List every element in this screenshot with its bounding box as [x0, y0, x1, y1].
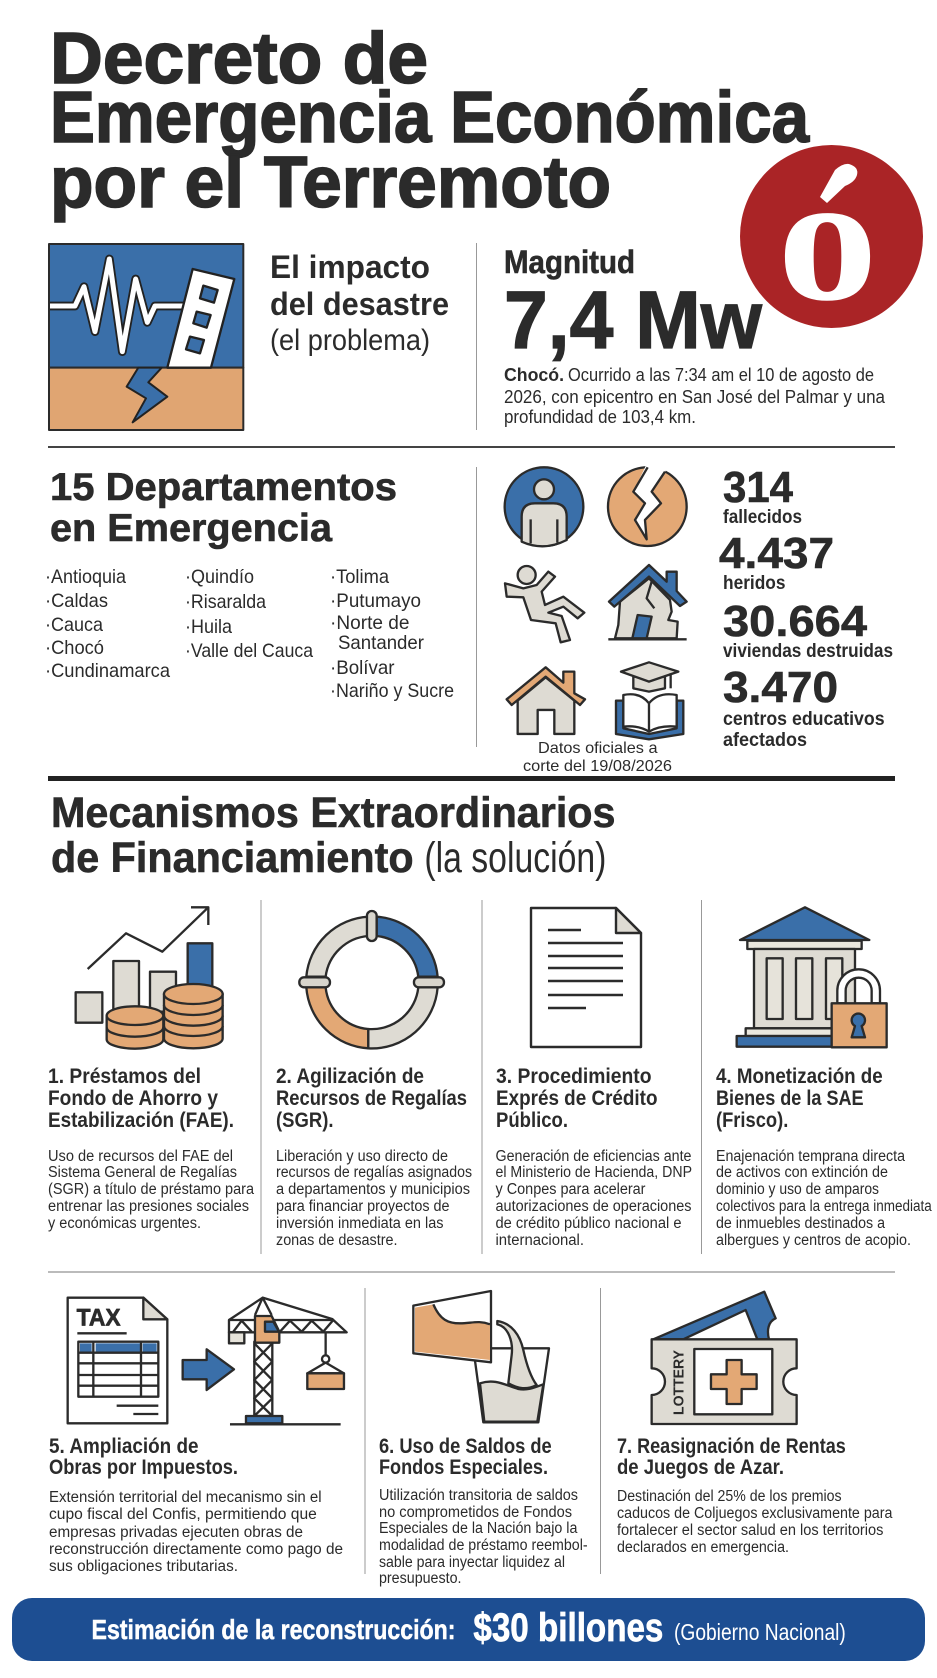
logo: red circle with ó: ó [777, 137, 878, 339]
mechanism 1: Estabilización (FAE). [48, 1109, 234, 1132]
mechanism 3: 3. Procedimiento [496, 1065, 652, 1088]
casualty statistics [719, 463, 893, 751]
earthquake description: 2026, con epicentro en San José del Palmar y una [504, 387, 886, 407]
heading: 15 departments [50, 466, 397, 550]
department list: ·Nariño y Sucre [330, 680, 454, 702]
mechanism 3: internacional. [496, 1232, 584, 1249]
mechanism 5: empresas privadas ejecuten obras de [49, 1524, 303, 1541]
mechanism 1 [48, 1065, 254, 1232]
mechanism 3: Público. [496, 1109, 568, 1132]
mechanism 1: Fondo de Ahorro y [48, 1087, 218, 1110]
mechanism 6: presupuesto. [379, 1570, 462, 1587]
mechanism 2: inversión inmediata en las [276, 1215, 444, 1232]
mechanism 7: Destinación del 25% de los premios [617, 1488, 842, 1505]
mechanism 6 [379, 1435, 588, 1587]
mechanism 2: Liberación y uso directo de [276, 1148, 448, 1165]
mechanism 6: 6. Uso de Saldos de [379, 1435, 552, 1458]
heading: impact of the disaster [270, 249, 449, 357]
title: Emergencia Económica [50, 78, 810, 158]
icon: graduation cap and book [616, 662, 683, 739]
heading: 15 departments: en Emergencia [50, 507, 332, 550]
title: Decreto de [50, 19, 428, 99]
heading: 15 departments: 15 Departamentos [50, 466, 397, 509]
icon: document [531, 908, 641, 1047]
heading: impact of the disaster: del desastre [270, 286, 449, 322]
mechanism 5: sus obligaciones tributarias. [49, 1558, 238, 1575]
mechanism 1: Uso de recursos del FAE del [48, 1148, 233, 1165]
mechanism 3 [496, 1065, 692, 1249]
earthquake description: profundidad de 103,4 km. [504, 407, 696, 427]
mechanism 7: caducos de Coljuegos exclusivamente para [617, 1505, 893, 1522]
heading: extraordinary financing mechanisms [51, 789, 616, 882]
mechanism 4: (Frisco). [716, 1109, 788, 1132]
department list: ·Putumayo [330, 590, 421, 612]
icon: cracked circle [608, 463, 687, 546]
banner: reconstruction estimate: (Gobierno Nacional) [674, 1619, 846, 1645]
casualty statistics: 314 [723, 463, 793, 512]
department list: ·Cauca [45, 614, 103, 636]
mechanism 7 [617, 1435, 893, 1556]
department list: ·Risaralda [185, 591, 266, 613]
logo: red circle with ó [740, 137, 923, 339]
mechanism 4: albergues y centros de acopio. [716, 1232, 911, 1249]
mechanism 4: de activos con extinción de [716, 1164, 888, 1181]
title [50, 19, 810, 223]
heading: impact of the disaster: (el problema) [270, 324, 430, 357]
department list: ·Caldas [45, 590, 108, 612]
department list: ·Bolívar [330, 657, 395, 679]
icon: pouring liquid [413, 1291, 549, 1422]
icon: house [507, 667, 585, 734]
mechanism 3: de crédito público nacional e [496, 1215, 682, 1232]
banner: reconstruction estimate: $30 billones [473, 1606, 663, 1650]
heading: extraordinary financing mechanisms: Mecanismos Extraordinarios [51, 789, 616, 837]
mechanism 1: 1. Préstamos del [48, 1065, 201, 1088]
mechanism 7: declarados en emergencia. [617, 1539, 789, 1556]
casualty statistics: 4.437 [719, 529, 834, 578]
department list: ·Cundinamarca [45, 660, 170, 682]
icon: bank and padlock [737, 907, 887, 1047]
mechanism 4: dominio y uso de amparos [716, 1181, 879, 1198]
mechanism 1: y económicas urgentes. [48, 1215, 201, 1232]
department list: ·Valle del Cauca [185, 640, 313, 662]
mechanism 2: para financiar proyectos de [276, 1198, 450, 1215]
heading: extraordinary financing mechanisms: de Financiamiento [51, 834, 414, 882]
mechanism 5: Extensión territorial del mecanismo sin el [49, 1489, 322, 1506]
heading: extraordinary financing mechanisms: (la solución) [424, 834, 606, 882]
earthquake description: Ocurrido a las 7:34 am el 10 de agosto de [568, 365, 874, 385]
mechanism 6: Especiales de la Nación bajo la [379, 1520, 578, 1537]
casualty statistics: heridos [723, 573, 786, 594]
mechanism 5: reconstrucción directamente como pago de [49, 1541, 343, 1558]
mechanism 3: Generación de eficiencias ante [496, 1148, 692, 1165]
banner: reconstruction estimate: Estimación de la reconstrucción: [92, 1614, 456, 1645]
department list: ·Norte de [330, 612, 410, 634]
mechanism 1: entrenar las presiones sociales [48, 1198, 249, 1215]
earthquake description [504, 365, 886, 427]
mechanism 7: 7. Reasignación de Rentas [617, 1435, 846, 1458]
icon: lottery ticket [652, 1292, 797, 1424]
mechanism 5: cupo fiscal del Confis, permitiendo que [49, 1506, 317, 1523]
department list [45, 566, 454, 702]
icon: falling person [505, 566, 584, 642]
icon: lottery ticket: LOTTERY [671, 1350, 687, 1415]
mechanism 6: sable para inyectar liquidez al [379, 1554, 565, 1571]
mechanism 2: a departamentos y municipios [276, 1181, 470, 1198]
mechanism 4: 4. Monetización de [716, 1065, 883, 1088]
magnitude stat: Magnitud [504, 244, 635, 280]
mechanism 6: modalidad de préstamo reembol- [379, 1537, 588, 1554]
icon: tax document [68, 1298, 167, 1423]
mechanism 3: el Ministerio de Hacienda, DNP [496, 1164, 692, 1181]
icon: earthquake seismograph and tilted building [49, 244, 243, 430]
mechanism 4: Enajenación temprana directa [716, 1148, 905, 1165]
department list: ·Quindío [185, 566, 254, 588]
mechanism 4 [716, 1065, 932, 1249]
department list: ·Chocó [45, 637, 104, 659]
banner: reconstruction estimate [12, 1598, 925, 1661]
casualty statistics: afectados [723, 730, 807, 751]
earthquake description: Chocó. [504, 365, 564, 385]
mechanism 1: Sistema General de Regalías [48, 1164, 237, 1181]
mechanism 2: (SGR). [276, 1109, 334, 1132]
department list: ·Antioquia [45, 566, 126, 588]
icon: bars, coins and growth arrow [76, 907, 223, 1049]
data cut-off note [523, 740, 672, 775]
mechanism 1: (SGR) a título de préstamo para [48, 1181, 254, 1198]
heading: impact of the disaster: El impacto [270, 249, 430, 285]
mechanism 5: Obras por Impuestos. [49, 1456, 238, 1479]
icon: tax document: TAX [77, 1305, 121, 1332]
title: por el Terremoto [50, 143, 611, 223]
mechanism 2: 2. Agilización de [276, 1065, 424, 1088]
casualty statistics: 30.664 [723, 597, 868, 646]
mechanism 2: recursos de regalías asignados [276, 1164, 472, 1181]
impact icons [505, 463, 687, 739]
department list: ·Huila [185, 616, 232, 638]
icon: crane [229, 1298, 347, 1424]
mechanism 2: Recursos de Regalías [276, 1087, 467, 1110]
mechanism 2: zonas de desastre. [276, 1232, 398, 1249]
data cut-off note: corte del 19/08/2026 [523, 758, 672, 775]
mechanism 7: de Juegos de Azar. [617, 1456, 784, 1479]
mechanism 5: 5. Ampliación de [49, 1435, 198, 1458]
arrow [183, 1349, 234, 1390]
mechanism 2 [276, 1065, 472, 1249]
icon: segmented ring [299, 911, 444, 1048]
casualty statistics: viviendas destruidas [723, 641, 893, 662]
mechanism 6: Utilización transitoria de saldos [379, 1487, 578, 1504]
department list: Santander [338, 632, 424, 654]
mechanism 3: y Conpes para acelerar [496, 1181, 646, 1198]
magnitude stat: 7,4 Mw [504, 275, 762, 366]
casualty statistics: 3.470 [723, 663, 838, 712]
mechanism 4: de inmuebles destinados a [716, 1215, 885, 1232]
icon: person [505, 467, 583, 546]
mechanism 5 [49, 1435, 343, 1575]
mechanism 7: fortalecer el sector salud en los territorios [617, 1522, 884, 1539]
mechanism 6: no comprometidos de Fondos [379, 1504, 572, 1521]
department list: ·Tolima [330, 566, 389, 588]
mechanism 3: autorizaciones de operaciones [496, 1198, 692, 1215]
data cut-off note: Datos oficiales a [538, 740, 658, 757]
mechanism 6: Fondos Especiales. [379, 1456, 548, 1479]
casualty statistics: centros educativos [723, 709, 885, 730]
icon: tax form, arrow and crane [68, 1298, 347, 1424]
mechanism 4: Bienes de la SAE [716, 1087, 864, 1110]
casualty statistics: fallecidos [723, 507, 802, 528]
mechanism 3: Exprés de Crédito [496, 1087, 658, 1110]
icon: damaged house [608, 565, 687, 639]
